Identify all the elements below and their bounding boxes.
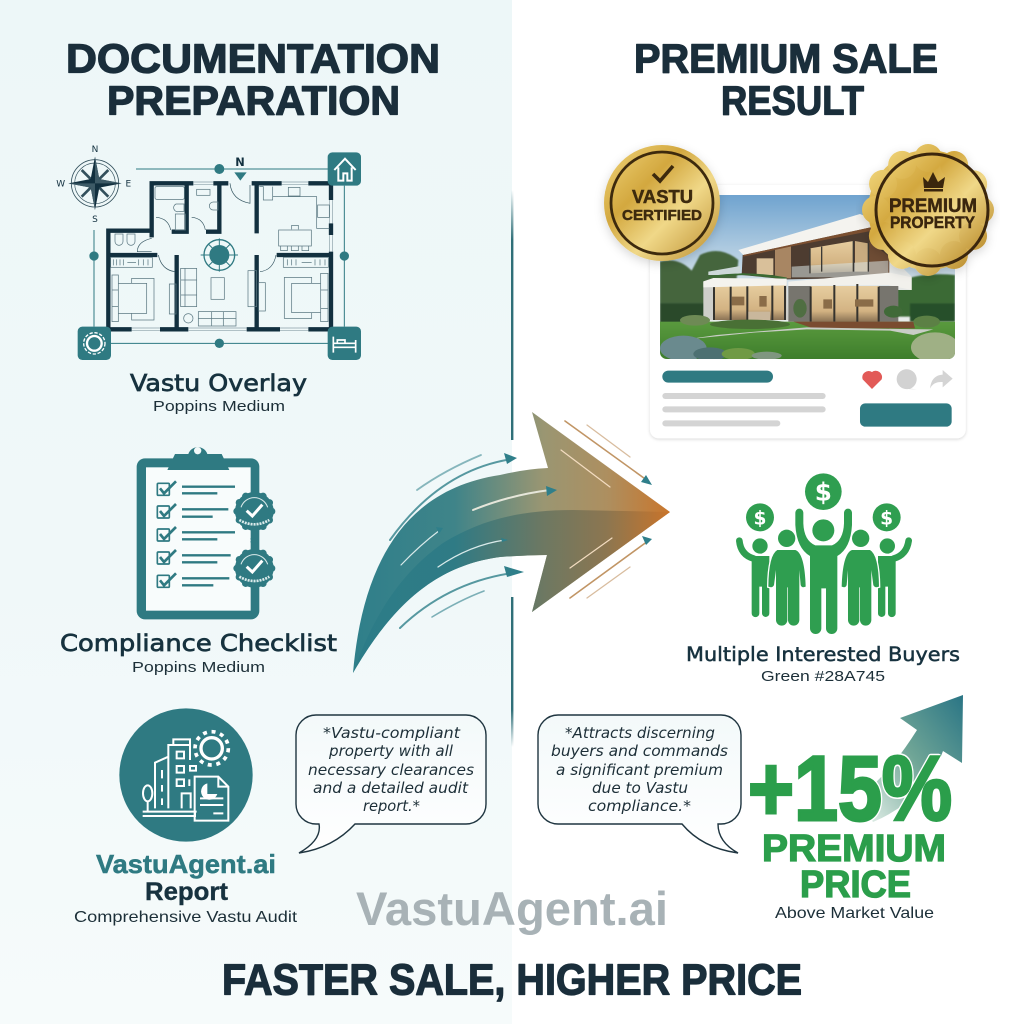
upper storey	[742, 226, 889, 279]
callout: right speech bubble: due to Vastu	[592, 779, 688, 797]
motion streaks	[390, 421, 648, 628]
callout: left speech bubble: property with all	[328, 742, 454, 760]
callout: right speech bubble: a significant premium	[556, 761, 723, 779]
arrow body	[353, 412, 670, 673]
stat: 15 percent premium price	[748, 738, 952, 922]
listing text placeholders	[662, 371, 952, 427]
compass rose: W	[56, 180, 65, 190]
callout: left speech bubble: necessary clearances	[308, 761, 474, 779]
heading: documentation preparation: DOCUMENTATION	[66, 36, 440, 82]
checklist rows	[157, 481, 235, 587]
badge: premium property: PROPERTY	[890, 213, 976, 232]
centre figure	[795, 509, 852, 634]
callout: right speech bubble: compliance.*	[588, 797, 692, 815]
badge: vastu certified: CERTIFIED	[622, 207, 702, 224]
label: vastuagent report: Report	[145, 878, 229, 906]
streak arrowheads	[436, 453, 652, 577]
coins: $	[880, 509, 893, 530]
callout: left speech bubble	[296, 715, 486, 853]
stat: 15 percent premium price: +15%	[748, 738, 952, 840]
compass rose: E	[125, 180, 131, 190]
callout: right speech bubble	[538, 715, 741, 853]
stat: 15 percent premium price: PRICE	[800, 864, 911, 906]
callout: left speech bubble: and a detailed audit	[313, 779, 469, 797]
label: vastuagent report: VastuAgent.ai	[96, 849, 276, 879]
watermark: VastuAgent.ai	[356, 882, 668, 935]
centre divider	[511, 190, 513, 747]
icon: compliance clipboard	[137, 447, 274, 619]
small side figures	[739, 538, 909, 617]
badge: premium property	[868, 150, 988, 270]
label: multiple interested buyers	[686, 643, 960, 685]
label: compliance checklist	[60, 631, 337, 676]
callout: left speech bubble: report.*	[363, 797, 420, 815]
panel: right background	[512, 0, 1024, 1024]
label: vastu overlay: Vastu Overlay	[130, 371, 307, 397]
icon: comment bubble	[897, 369, 917, 389]
badge: vastu certified: VASTU	[632, 187, 693, 207]
heading: documentation preparation	[66, 36, 440, 124]
label: compliance checklist: Poppins Medium	[132, 659, 265, 676]
coins: $	[815, 478, 832, 507]
coins	[746, 473, 901, 531]
north marker: N	[235, 155, 245, 169]
stat: 15 percent premium price: PREMIUM	[762, 828, 946, 870]
walls	[108, 183, 331, 329]
icon: report badge	[119, 708, 253, 842]
clipboard clip	[167, 447, 229, 470]
arrow lower shade	[353, 510, 670, 673]
badge: vastu certified	[604, 145, 720, 261]
label: compliance checklist: Compliance Checklist	[60, 631, 337, 657]
approval seals	[235, 492, 274, 588]
overlay guide lines	[89, 164, 349, 348]
property photo	[660, 195, 959, 362]
icon: interested buyers	[739, 473, 909, 634]
stat: 15 percent premium price: Above Market Value	[775, 905, 934, 922]
compass rose	[56, 145, 131, 225]
tile: home icon	[328, 152, 361, 186]
panel: left background	[0, 0, 512, 1024]
stat: 15 percent premium price: +15%	[748, 738, 952, 840]
label: vastuagent report	[74, 849, 298, 926]
middle figures	[768, 530, 879, 626]
heading: documentation preparation: PREPARATION	[107, 78, 400, 124]
floor plan: vastu overlay	[56, 145, 361, 360]
footer headline: FASTER SALE, HIGHER PRICE	[222, 956, 802, 1004]
coins: $	[754, 509, 766, 530]
compass rose: S	[92, 215, 98, 225]
windows	[132, 182, 332, 331]
callout: right speech bubble: buyers and commands	[551, 742, 728, 760]
compass rose: N	[92, 145, 98, 155]
room fixtures and furniture	[111, 183, 329, 326]
callout: right speech bubble: *Attracts discerning	[565, 724, 715, 742]
label: multiple interested buyers: Multiple Interested Buyers	[686, 643, 960, 666]
icon: share arrow	[930, 370, 953, 389]
heading: premium sale result	[634, 36, 938, 124]
callout: left speech bubble: *Vastu-compliant	[323, 724, 461, 742]
label: vastu overlay	[130, 371, 307, 415]
badge: premium property: PREMIUM	[889, 196, 977, 217]
north marker	[234, 155, 247, 181]
ground storey	[703, 279, 788, 320]
label: vastu overlay: Poppins Medium	[153, 398, 285, 415]
growth arrow	[866, 695, 963, 822]
icon: heart	[862, 371, 882, 389]
property listing card	[650, 185, 966, 438]
transition arrow	[353, 412, 670, 673]
heading: premium sale result: PREMIUM SALE	[634, 36, 938, 82]
label: multiple interested buyers: Green #28A745	[761, 668, 885, 685]
tile: ring icon	[78, 327, 111, 360]
tile: bed icon	[328, 327, 361, 360]
heading: premium sale result: RESULT	[721, 78, 864, 124]
label: vastuagent report: Comprehensive Vastu Audit	[74, 909, 298, 926]
